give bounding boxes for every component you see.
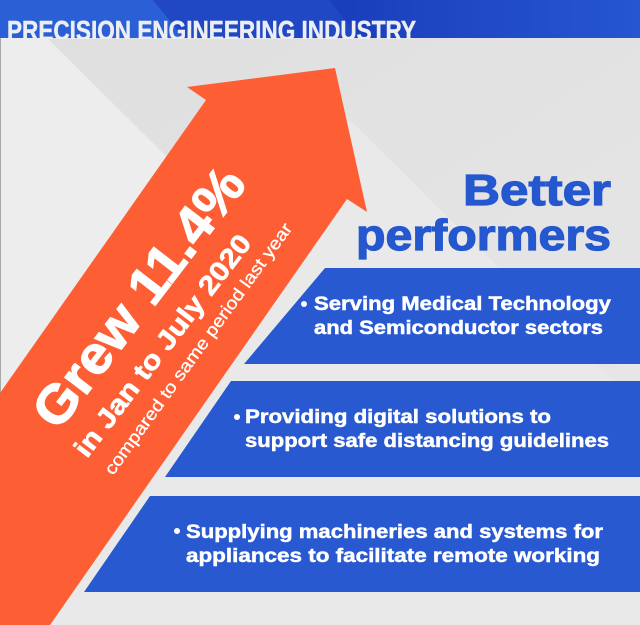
- panel: medical technology: and Semiconductor sectors: [314, 317, 603, 339]
- panel: digital solutions: support safe distancing guidelines: [245, 430, 609, 452]
- arrow headline: Grew 11.4%: [21, 156, 257, 439]
- panel: digital solutions: Providing digital solutions to: [245, 406, 551, 428]
- panel: remote working: [84, 496, 640, 592]
- arrow: [0, 68, 367, 625]
- panel: medical technology: [244, 268, 640, 364]
- panel: remote working: appliances to facilitate remote working: [186, 545, 600, 567]
- arrow note: compared to same period last year: [100, 219, 296, 478]
- panel: remote working: Supplying machineries and systems for: [186, 521, 603, 543]
- arrow subheading: in Jan to July 2020: [68, 229, 257, 463]
- heading: Better performers: Better: [463, 166, 611, 215]
- title: PRECISION ENGINEERING INDUSTRY: [7, 15, 416, 46]
- header band: [0, 0, 640, 39]
- heading: Better performers: performers: [356, 211, 611, 260]
- heading: Better performers: [356, 166, 611, 260]
- panel: medical technology: Serving Medical Technology: [314, 293, 611, 315]
- panel: digital solutions: [165, 381, 640, 477]
